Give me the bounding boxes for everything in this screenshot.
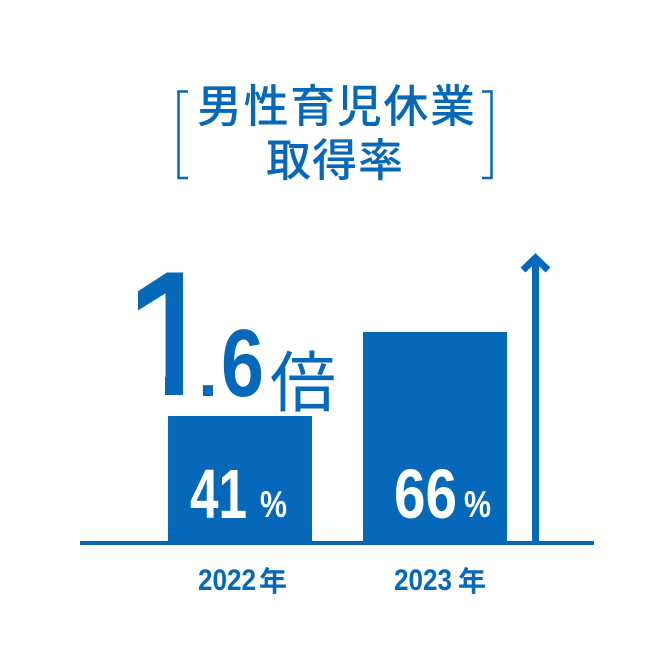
year label 2022: 2022	[198, 564, 256, 597]
right bracket	[482, 92, 492, 178]
multiplier 1.6倍	[138, 272, 334, 412]
year label 2023: 2023	[394, 564, 452, 597]
bar 2022	[168, 416, 312, 545]
left bracket	[178, 92, 188, 178]
multiplier 1.6倍: 6	[221, 310, 264, 417]
title line 1: 男性育児休業	[197, 81, 475, 132]
value 41%: 41	[190, 455, 247, 533]
multiplier 1.6倍: 1	[124, 234, 223, 433]
value 66%: 66	[394, 455, 457, 533]
multiplier 1.6倍: 倍	[270, 346, 336, 420]
value 66%: %	[464, 484, 491, 525]
icon: upward arrow	[523, 258, 548, 543]
value 41%: %	[260, 484, 287, 525]
title line 2: 取得率	[266, 135, 403, 186]
year label 2022: 年	[259, 566, 287, 597]
title block	[178, 81, 492, 186]
multiplier 1.6倍: .	[198, 332, 218, 412]
infographic: paternity leave uptake	[80, 84, 594, 594]
year label 2023: 年	[458, 566, 486, 597]
bar 2023	[363, 332, 507, 545]
baseline axis	[80, 541, 594, 545]
